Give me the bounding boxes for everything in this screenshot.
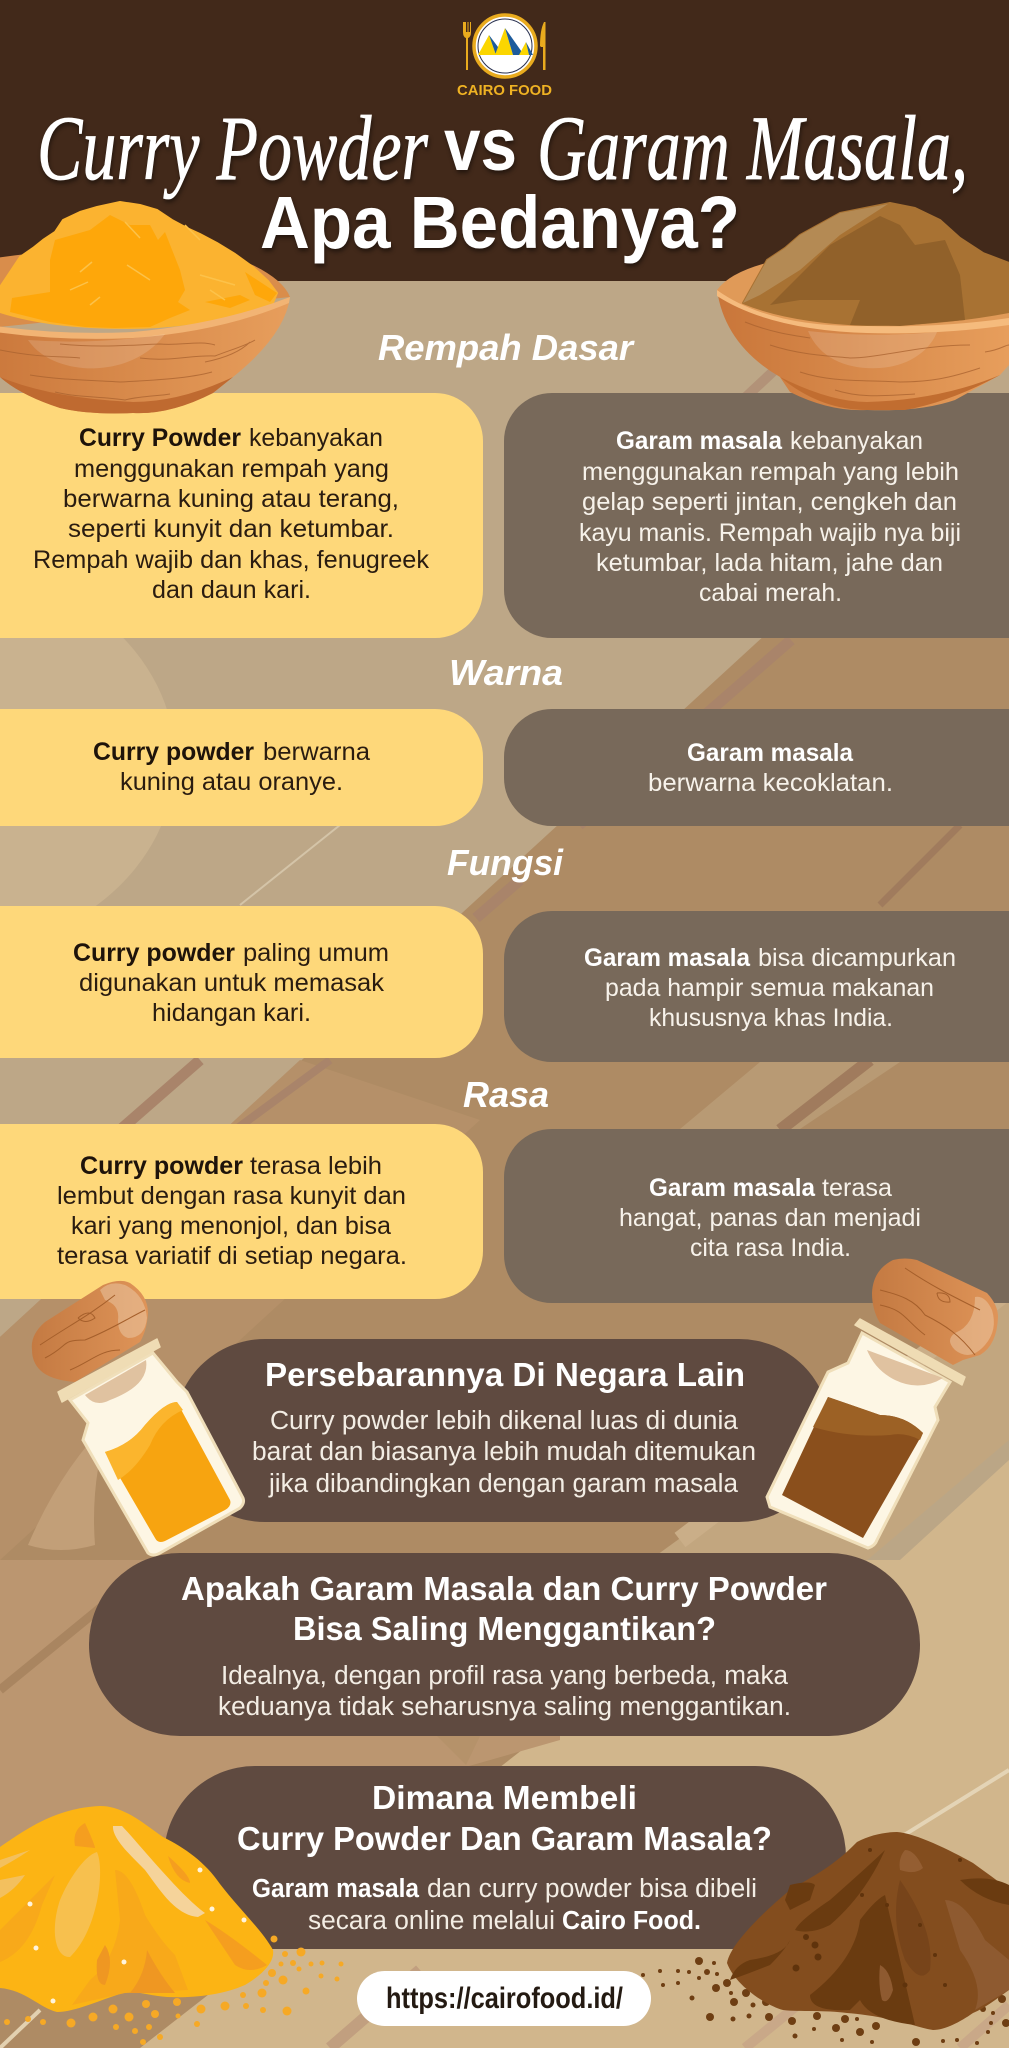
title: Curry Powder xyxy=(37,97,429,199)
heading: Warna: Warna xyxy=(449,652,563,693)
title xyxy=(37,97,968,264)
panel: Rasa garam masala: cita rasa India. xyxy=(690,1234,851,1262)
panel: Rempah Dasar garam masala: Garam masala xyxy=(616,427,783,455)
panel: Apakah saling menggantikan: Bisa Saling Menggantikan? xyxy=(293,1610,716,1647)
panel: Rasa garam masala: hangat, panas dan menjadi xyxy=(619,1204,921,1232)
icon: fork xyxy=(463,22,471,70)
panel: Fungsi garam masala xyxy=(504,911,1009,1062)
panel: Dimana membeli xyxy=(164,1766,846,1949)
illustration: curry powder pile xyxy=(0,1806,344,2045)
illustration: curry jar xyxy=(32,1281,244,1555)
panel: Rasa curry powder: terasa lebih xyxy=(250,1152,382,1180)
panel: Rasa curry powder: kari yang menonjol, dan bisa xyxy=(71,1212,391,1240)
panel: Dimana membeli: Dimana Membeli xyxy=(372,1779,637,1816)
rim xyxy=(855,1319,965,1385)
panel: Dimana membeli: Cairo Food. xyxy=(562,1907,701,1935)
highlight stripes xyxy=(55,1852,100,1957)
panel: Rasa curry powder: Curry powder xyxy=(80,1152,243,1180)
heading: Fungsi: Fungsi xyxy=(447,842,564,883)
panel: Rasa garam masala: terasa xyxy=(822,1174,892,1202)
panel: Fungsi curry powder: paling umum xyxy=(243,939,389,967)
panel: Rempah Dasar curry powder: dan daun kari. xyxy=(152,576,311,604)
panel: Persebarannya di negara lain: Curry powder lebih dikenal luas di dunia xyxy=(270,1407,739,1435)
panel: Warna curry powder: Curry powder xyxy=(93,738,254,766)
panel: Persebarannya di negara lain: Persebarannya Di Negara Lain xyxy=(265,1356,745,1393)
illustration: bowl of curry powder xyxy=(0,202,290,413)
panel: Rempah Dasar curry powder: berwarna kuning atau terang, xyxy=(63,485,399,513)
url button xyxy=(357,1971,651,2026)
header band xyxy=(0,0,1009,281)
rim xyxy=(58,1339,160,1402)
heading: Rasa: Rasa xyxy=(463,1074,549,1115)
illustration: bowl of garam masala xyxy=(717,203,1009,410)
panel: Rempah Dasar curry powder xyxy=(0,393,483,638)
panel: Rempah Dasar curry powder: Rempah wajib dan khas, fenugreek xyxy=(33,546,429,574)
panel: Warna curry powder: kuning atau oranye. xyxy=(120,768,343,796)
panel: Apakah saling menggantikan: keduanya tidak seharusnya saling menggantikan. xyxy=(218,1693,791,1721)
panel: Fungsi curry powder xyxy=(0,906,483,1058)
url button: https://cairofood.id/ xyxy=(386,1982,624,2015)
panel: Fungsi garam masala: khususnya khas India. xyxy=(649,1004,893,1032)
panel: Warna garam masala: Garam masala xyxy=(687,739,854,767)
panel: Fungsi curry powder: hidangan kari. xyxy=(152,999,311,1027)
glass xyxy=(767,1333,950,1548)
panel: Fungsi curry powder: Curry powder xyxy=(73,939,235,967)
panel: Apakah saling menggantikan: Idealnya, dengan profil rasa yang berbeda, maka xyxy=(221,1662,789,1690)
illustration: garam masala jar xyxy=(767,1258,998,1548)
illustration: garam masala pile xyxy=(641,1832,1009,2046)
panel: Warna garam masala: berwarna kecoklatan. xyxy=(648,769,893,797)
icon: knife xyxy=(540,22,546,70)
panel: Rempah Dasar garam masala: kebanyakan xyxy=(790,427,923,455)
cork xyxy=(872,1258,998,1365)
panel: Rasa garam masala xyxy=(504,1129,1009,1303)
panel: Fungsi garam masala: pada hampir semua makanan xyxy=(605,974,934,1002)
panel: Rempah Dasar curry powder: kebanyakan xyxy=(249,424,383,452)
panel: Warna garam masala xyxy=(504,709,1009,826)
cork xyxy=(32,1281,148,1382)
panel: Rempah Dasar garam masala: ketumbar, lada hitam, jahe dan xyxy=(596,549,943,577)
panel: Rempah Dasar garam masala: cabai merah. xyxy=(699,579,842,607)
panel: Persebarannya di negara lain xyxy=(174,1339,830,1522)
panel: Fungsi garam masala: Garam masala xyxy=(584,944,751,972)
panel: Rempah Dasar garam masala: gelap seperti jintan, cengkeh dan xyxy=(582,488,957,516)
panel: Apakah saling menggantikan xyxy=(89,1553,920,1736)
panel: Dimana membeli: secara online melalui xyxy=(308,1907,555,1935)
panel: Rempah Dasar curry powder: Curry Powder xyxy=(79,424,241,452)
heading: Rempah Dasar: Rempah Dasar xyxy=(378,327,635,368)
panel: Warna curry powder: berwarna xyxy=(263,738,370,766)
panel: Warna curry powder xyxy=(0,709,483,826)
title: vs xyxy=(444,103,517,186)
panel: Persebarannya di negara lain: jika dibandingkan dengan garam masala xyxy=(268,1470,739,1498)
panel: Persebarannya di negara lain: barat dan biasanya lebih mudah ditemukan xyxy=(252,1438,756,1466)
panel: Apakah saling menggantikan: Apakah Garam Masala dan Curry Powder xyxy=(181,1570,827,1607)
logo: Cairo Food xyxy=(457,15,552,99)
panel: Rempah Dasar curry powder: seperti kunyit dan ketumbar. xyxy=(68,515,394,543)
panel: Rempah Dasar garam masala xyxy=(504,393,1009,638)
panel: Rempah Dasar garam masala: kayu manis. Rempah wajib nya biji xyxy=(579,519,961,547)
panel: Dimana membeli: Garam masala xyxy=(252,1875,420,1903)
panel: Dimana membeli: dan curry powder bisa dibeli xyxy=(427,1875,757,1903)
glass xyxy=(70,1353,244,1555)
powder xyxy=(105,1402,230,1542)
panel: Rasa curry powder: lembut dengan rasa kunyit dan xyxy=(57,1182,406,1210)
powder xyxy=(782,1397,923,1538)
logo text: CAIRO FOOD xyxy=(457,82,552,99)
panel: Rasa garam masala: Garam masala xyxy=(649,1174,816,1202)
panel: Fungsi garam masala: bisa dicampurkan xyxy=(758,944,956,972)
panel: Rempah Dasar garam masala: menggunakan rempah yang lebih xyxy=(582,458,959,486)
panel: Rasa curry powder: terasa variatif di setiap negara. xyxy=(57,1242,407,1270)
panel: Fungsi curry powder: digunakan untuk memasak xyxy=(79,969,385,997)
panel: Dimana membeli: Curry Powder Dan Garam Masala? xyxy=(237,1820,772,1857)
title: Apa Bedanya? xyxy=(260,181,740,264)
icon: plate with pyramids xyxy=(474,15,536,77)
panel: Rempah Dasar curry powder: menggunakan rempah yang xyxy=(74,455,389,483)
panel: Rasa curry powder xyxy=(0,1124,483,1299)
